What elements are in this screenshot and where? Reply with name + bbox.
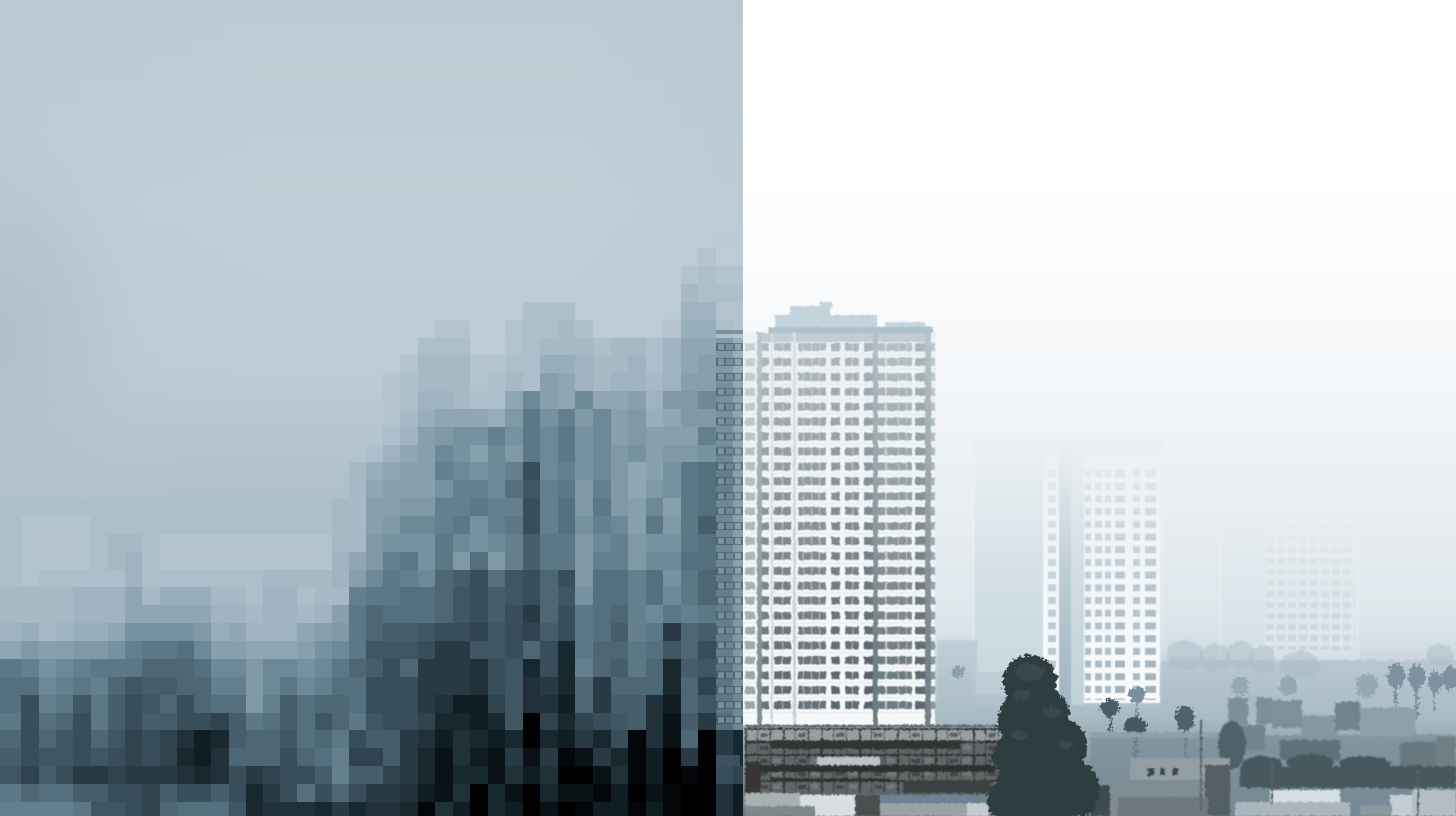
palm trees (952, 664, 1456, 762)
low rooftops (745, 793, 989, 816)
hazy treeline (937, 640, 1456, 725)
tower windows showing through the mosaic edge (716, 330, 743, 766)
scaffolding below tower (745, 725, 1000, 795)
dark tree band (1240, 754, 1456, 788)
sky gradient (743, 0, 1456, 816)
foreground tree (987, 655, 1099, 816)
foreground buildings right (1090, 720, 1456, 816)
left panel: mosaic of pixel blocks forming the skyline (0, 266, 743, 816)
left panel: hazy sky backdrop (0, 0, 743, 816)
distant building, centre (972, 440, 1164, 706)
main tower (716, 302, 936, 725)
mid-distance city buildings (1090, 694, 1456, 816)
distant building, right (1218, 515, 1360, 660)
tower roof (768, 302, 933, 333)
